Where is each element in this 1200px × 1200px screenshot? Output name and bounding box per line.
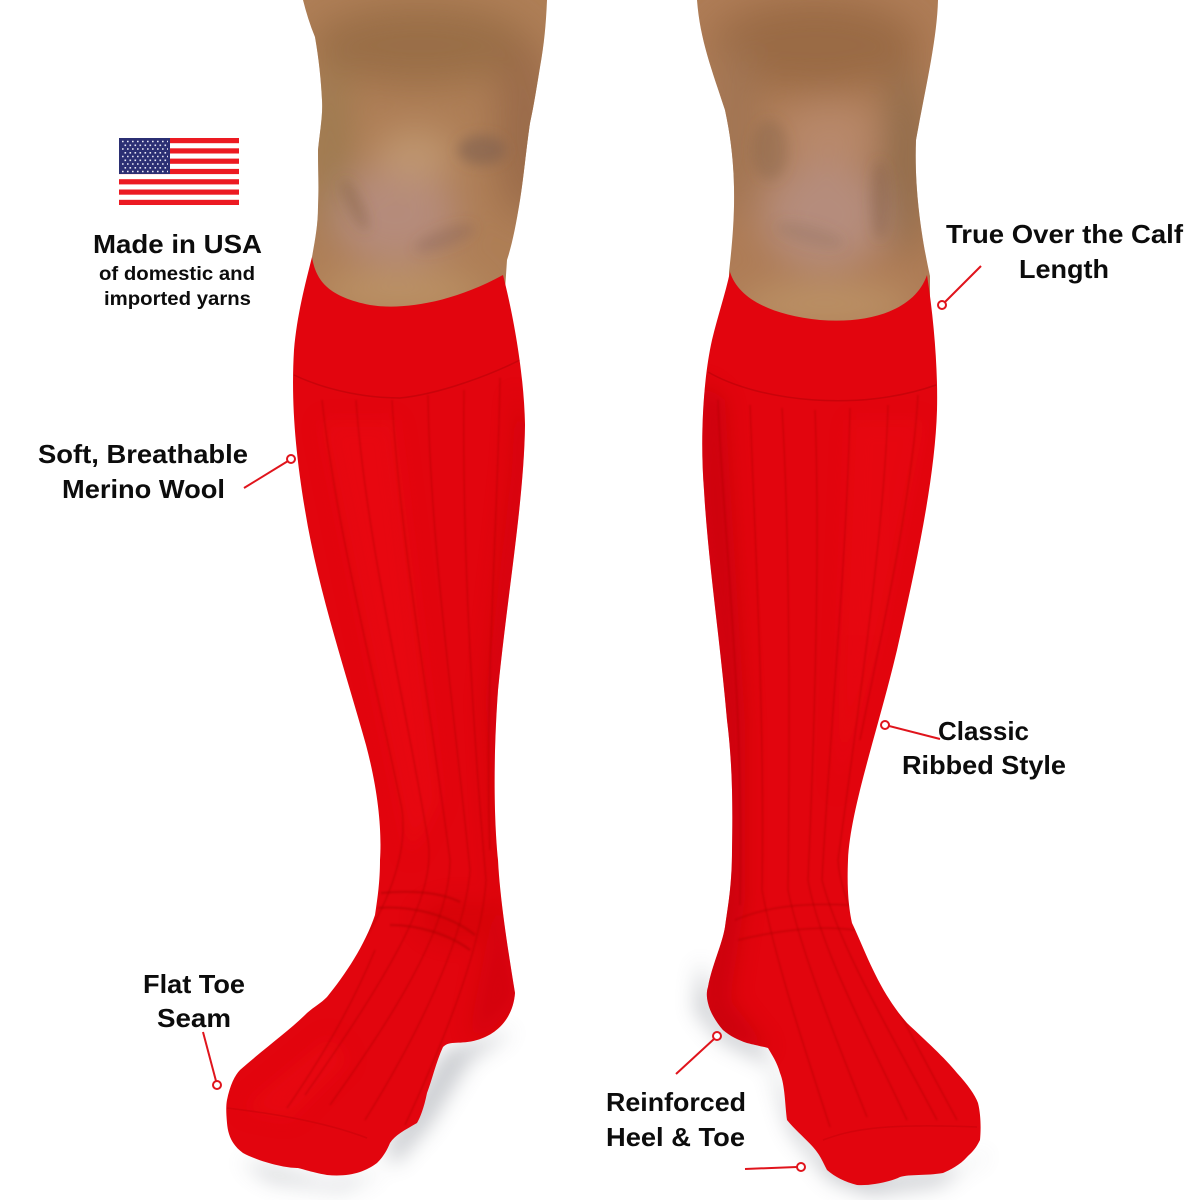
callout: Flat Toe Seam <box>143 969 245 1089</box>
callout: Reinforced Heel & Toe: Reinforced <box>606 1087 746 1117</box>
callout: Reinforced Heel & Toe: Heel & Toe <box>606 1122 745 1152</box>
callout: Made in USA: imported yarns <box>104 289 251 310</box>
callout: Soft, Breathable Merino Wool: Soft, Breathable <box>38 439 248 469</box>
callout: Soft, Breathable Merino Wool <box>38 439 295 504</box>
callout: Classic Ribbed Style: Classic <box>938 716 1029 746</box>
callout: Made in USA: Made in USA <box>93 229 262 259</box>
right ankle wrinkles <box>735 904 855 940</box>
right toe seam <box>823 1126 977 1140</box>
left sock <box>226 257 530 1175</box>
callout: Flat Toe Seam: Seam <box>157 1003 231 1033</box>
left ankle wrinkles <box>378 892 475 950</box>
floor shadows under the feet <box>240 960 990 1195</box>
left leg skin <box>295 0 555 320</box>
left toe seam <box>227 1108 367 1138</box>
callout: Made in USA: of domestic and <box>99 264 255 285</box>
callout: True Over the Calf Length <box>938 219 1183 309</box>
icon: American flag <box>119 138 239 205</box>
right sock ribs <box>718 395 957 1127</box>
callout: Reinforced Heel & Toe <box>606 1032 805 1171</box>
callout: Classic Ribbed Style: Ribbed Style <box>902 750 1066 780</box>
callout: Soft, Breathable Merino Wool: Merino Wool <box>62 474 225 504</box>
callout: True Over the Calf Length: Length <box>1019 254 1109 284</box>
right sock <box>700 272 981 1185</box>
callout: Flat Toe Seam: Flat Toe <box>143 969 245 999</box>
left sock cuff band <box>294 360 520 398</box>
right sock cuff band <box>708 372 936 401</box>
callout: Made in USA <box>93 229 262 310</box>
right leg skin <box>690 0 945 330</box>
callout: Classic Ribbed Style <box>881 716 1066 780</box>
callout: True Over the Calf Length: True Over the Calf <box>946 219 1183 249</box>
left sock ribs <box>287 378 500 1125</box>
